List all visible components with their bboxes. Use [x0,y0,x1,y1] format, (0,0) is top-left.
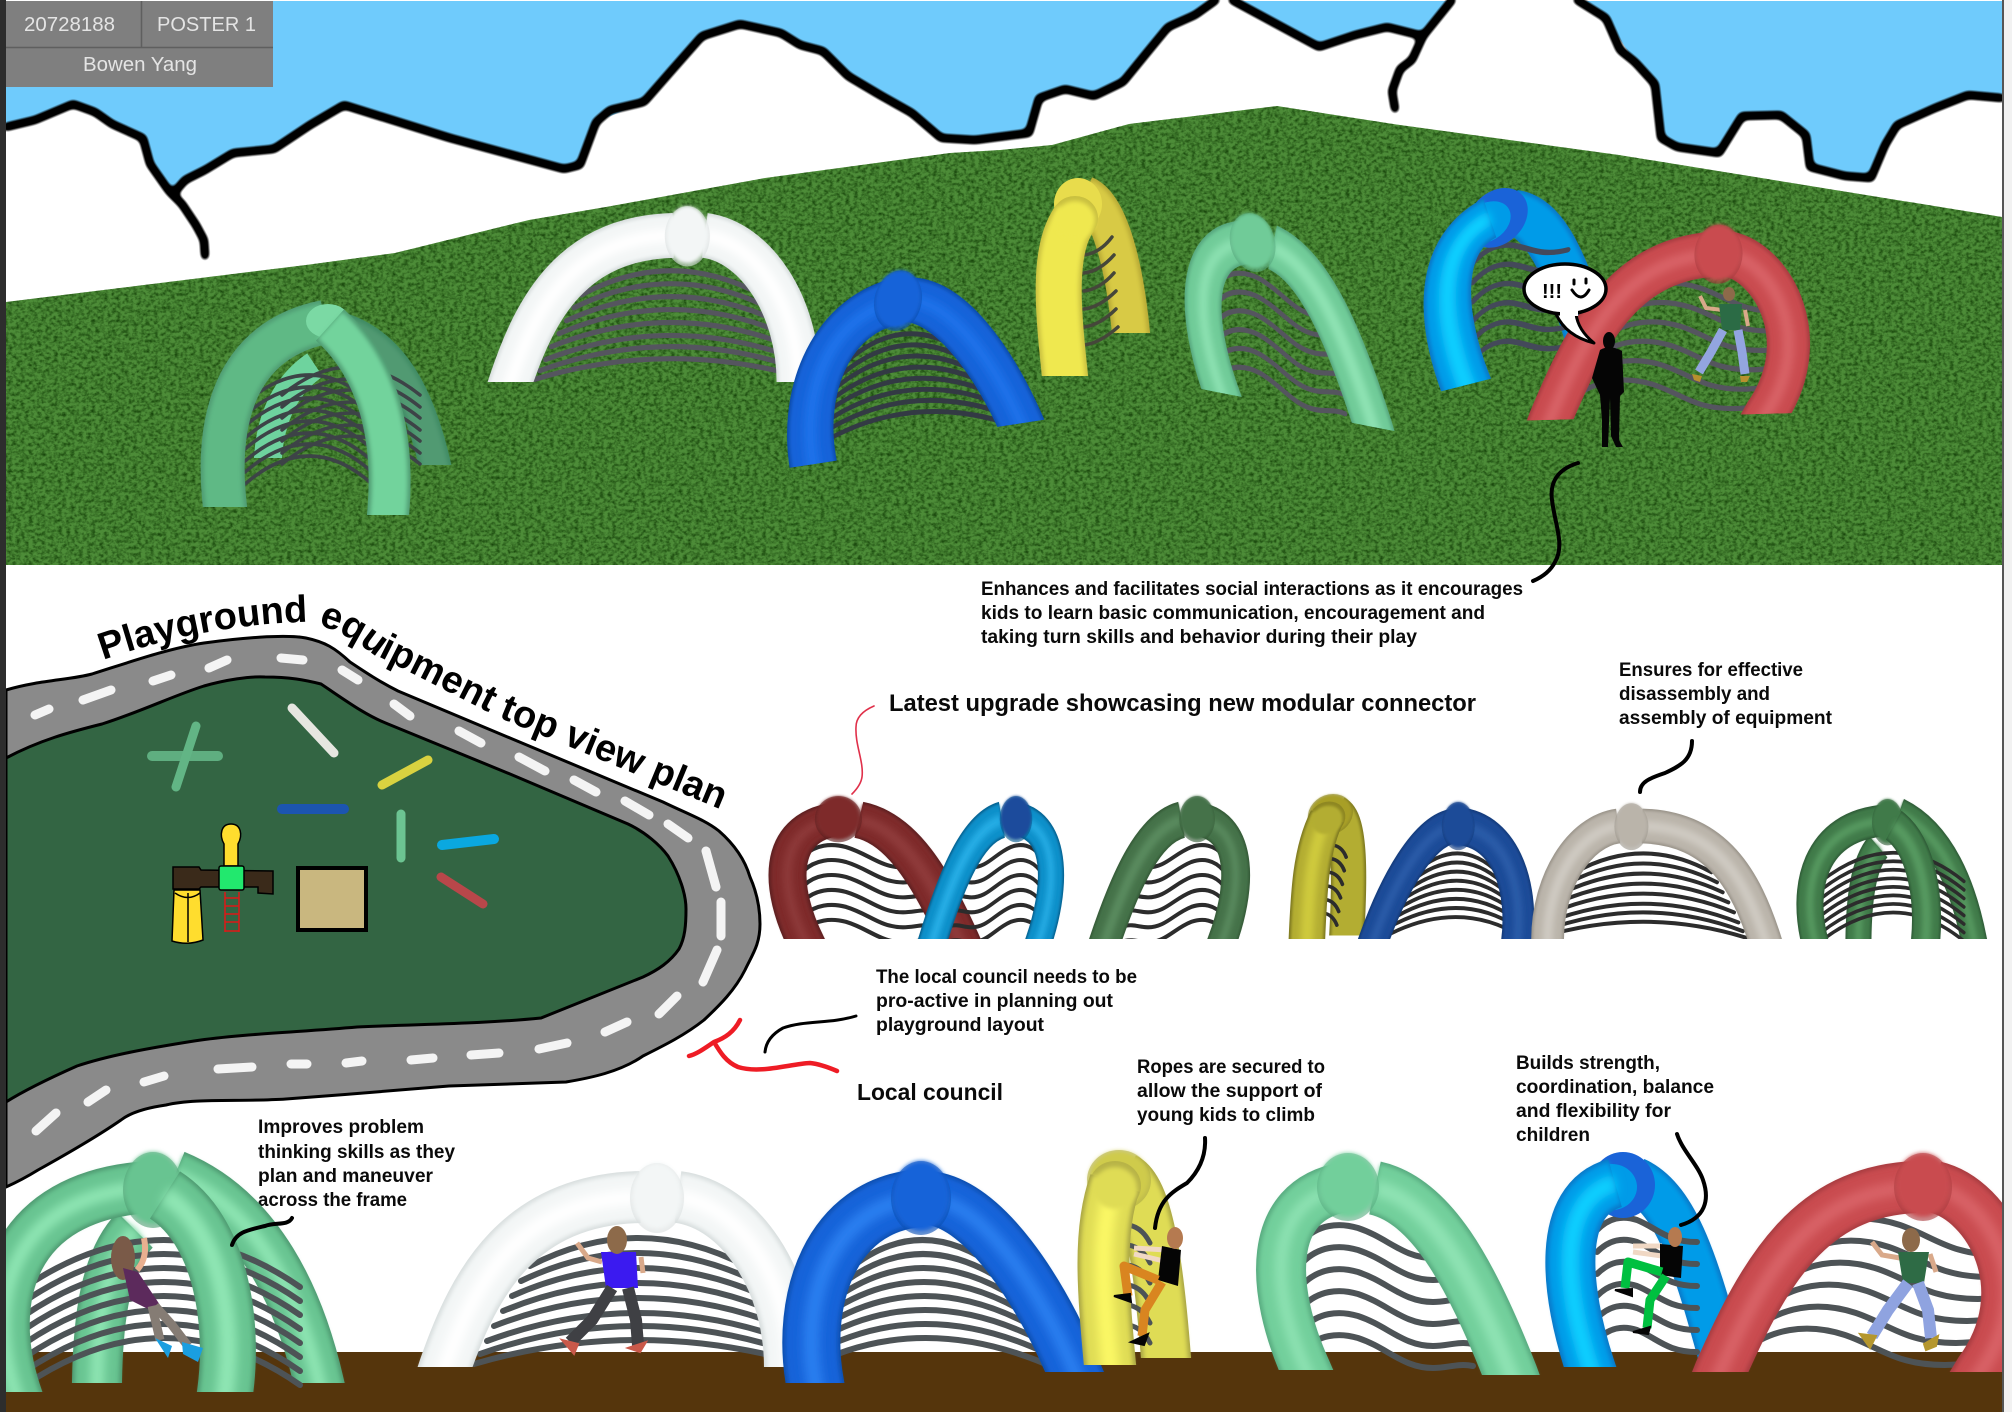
arch: dark green frame [1097,796,1236,967]
author name: Bowen Yang [83,54,197,76]
heading: modular connector: Latest upgrade showcasing new modular connector [889,690,1476,717]
arch: green wavy frame [1281,1153,1522,1405]
plan: sandbox [298,868,366,930]
arch: green four-leg frame, hill [223,304,442,545]
poster number: POSTER 1 [157,14,256,36]
arch: olive frame [1288,792,1366,939]
text: builds strength [1516,1053,1714,1146]
person: climber on red frame, hill [1692,287,1750,382]
text: ropes secured: young kids to climb [1137,1105,1315,1126]
arch: green four-leg frame [4,1152,326,1412]
person: climber on red frame [1860,1228,1938,1350]
arch: yellow frame, hill [1052,178,1134,406]
mountain outline [6,0,2002,256]
ground strip [6,1352,2002,1412]
plan: red frame [441,877,483,904]
road dashes [35,658,721,1131]
plan: green frame [396,814,406,858]
arch: green wavy frame, hill [1203,204,1381,454]
arch: forest green frame [1810,799,1978,964]
speech bubble: !!! [1542,281,1562,303]
sky [6,1,2002,301]
plan: cyan frame [442,839,494,845]
arch: cyan frame [1570,1152,1733,1400]
text: assembly: disassembly and [1619,684,1770,705]
plan: yellow frame [382,760,428,785]
text: local council needs: pro-active in planning out [876,991,1114,1012]
annotation line: social interactions [1533,463,1578,581]
left window strip [0,0,6,1412]
arch: dark red frame [787,796,971,967]
annotation line: strength [1677,1134,1706,1225]
text: social interactions: kids to learn basic communication, encouragement and [981,603,1485,624]
annotation line: red council marker [689,1020,837,1071]
plan: green four-leg frame [152,726,218,787]
text: social interactions [981,579,1523,648]
arch: blue frame, hill [806,250,1032,490]
grass lawn [6,677,686,1102]
text: problem thinking: Improves problem [258,1117,424,1138]
label: local council: Local council [857,1079,1003,1105]
arch: grey frame [1539,803,1771,960]
arch: teal blue frame [925,796,1051,967]
text: assembly [1619,660,1833,729]
annotation line: ropes [1155,1138,1205,1228]
text: local council needs: The local council needs to be [876,967,1137,988]
student number: 20728188 [24,14,115,36]
plan: blue frame [282,804,344,814]
person: boy with blue shirt [562,1226,646,1354]
person: climber orange trousers [1114,1227,1183,1345]
arch: blue frame [806,1161,1088,1412]
text: problem thinking: thinking skills as they [258,1142,455,1163]
panel: modular equipment row [768,792,1988,939]
arch: cyan frame, hill [1447,162,1602,419]
plan: play structure [172,824,273,943]
text: problem thinking: plan and maneuver [258,1166,434,1187]
speech bubble [1524,264,1606,343]
title: curved plan heading: Playground equipment top view plan [97,594,724,808]
text: local council needs [876,967,1137,1036]
annotation line: council text [765,1016,856,1052]
person: climber green trousers [1615,1227,1683,1334]
panel: top view plan [6,636,760,1187]
person: black silhouette [1592,332,1624,447]
arch: white frame [435,1163,804,1397]
text: social interactions: Enhances and facilitates social interactions as it encourages [981,579,1523,600]
text: builds strength: and flexibility for [1516,1101,1672,1122]
right window strip [2002,0,2012,1412]
person: girl climbing [111,1236,203,1362]
grass hill [6,106,2002,565]
annotation line: assembly [1640,741,1692,792]
text: builds strength: Builds strength, [1516,1053,1660,1074]
plan: white frame [292,708,334,753]
arch: red frame [1708,1153,2012,1402]
arch: navy frame [1367,802,1521,966]
text: problem thinking [258,1117,455,1211]
panel: hillside landscape [6,0,2002,581]
panel: climbing scenes row [4,1150,2012,1412]
text: problem thinking: across the frame [258,1190,407,1211]
text: builds strength: children [1516,1125,1590,1146]
text: local council needs: playground layout [876,1015,1045,1036]
text: ropes secured [1137,1057,1325,1126]
text: builds strength: coordination, balance [1516,1077,1714,1098]
road [6,636,760,1187]
header box [6,1,273,87]
text: social interactions: taking turn skills and behavior during their play [981,627,1417,648]
text: assembly: assembly of equipment [1619,708,1833,729]
text: ropes secured: allow the support of [1137,1081,1323,1102]
arch: white frame, hill [502,206,810,408]
snow mountains [6,0,2002,400]
arch: red frame, hill [1540,222,1797,446]
annotation line: red connector pointer [852,706,874,794]
annotation line: problem thinking [232,1218,292,1245]
text: ropes secured: Ropes are secured to [1137,1057,1325,1078]
text: assembly: Ensures for effective [1619,660,1803,681]
arch: yellow frame [1087,1150,1168,1395]
